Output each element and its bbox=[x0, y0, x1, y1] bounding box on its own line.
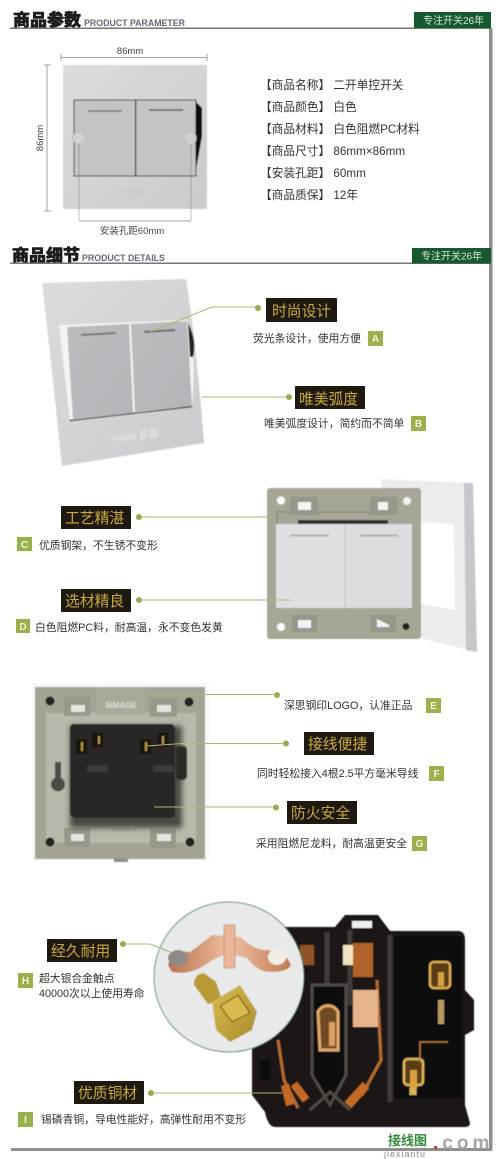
watermark: 接线图 bbox=[388, 1133, 427, 1148]
header: product details: PRODUCT DETAILS bbox=[82, 253, 165, 263]
spec list: 【商品材料】 白色阻燃PC材料 bbox=[260, 122, 420, 136]
callout C: 工艺精湛: 优质钢架，不生锈不变形 bbox=[39, 538, 158, 552]
callout G: 防火安全 bbox=[154, 801, 427, 851]
callout I: 优质铜材: 锡磷青铜，导电性能好，高弹性耐用不变形 bbox=[41, 1112, 246, 1126]
header: product details bbox=[10, 246, 491, 266]
callout I: 优质铜材: 优质铜材 bbox=[78, 1085, 137, 1102]
callout A: 时尚设计: 荧光条设计，使用方便 bbox=[253, 331, 361, 345]
header: product parameter bbox=[10, 10, 491, 30]
header: product parameter: PRODUCT PARAMETER bbox=[84, 18, 186, 28]
header: product details: 专注开关26年 bbox=[421, 250, 482, 262]
spec list: 【商品颜色】 白色 bbox=[260, 100, 357, 114]
callout I: 优质铜材 bbox=[18, 1081, 282, 1127]
spec list: 【商品名称】 二开单控开关 bbox=[260, 78, 404, 92]
watermark: .com bbox=[433, 1133, 493, 1154]
callout F: 接线便捷: F bbox=[433, 769, 440, 780]
photo: switch opened with frame bbox=[267, 479, 477, 652]
watermark bbox=[383, 1133, 493, 1159]
60mm hole spacing bbox=[79, 144, 191, 237]
callout D: 选材精良: D bbox=[19, 622, 27, 633]
callout G: 防火安全: 防火安全 bbox=[291, 804, 350, 822]
switch front view: SIMON bbox=[121, 189, 143, 196]
86mm width dimension bbox=[61, 46, 207, 61]
callout D: 选材精良: 白色阻燃PC料，耐高温，永不变色发黄 bbox=[35, 620, 223, 634]
callout H: 经久耐用: 超大银合金触点 bbox=[39, 971, 115, 985]
header: product parameter: 专注开关26年 bbox=[423, 14, 484, 27]
callout I: 优质铜材: I bbox=[24, 1115, 27, 1126]
callout A: 时尚设计: 时尚设计 bbox=[272, 303, 331, 320]
photo: switch perspective view bbox=[42, 279, 204, 466]
callout A: 时尚设计: A bbox=[372, 334, 379, 345]
callout C: 工艺精湛 bbox=[17, 506, 272, 552]
header: product parameter: 商品参数 bbox=[13, 10, 81, 30]
callout H: 经久耐用 bbox=[18, 939, 170, 1000]
callout H: 经久耐用: 经久耐用 bbox=[51, 943, 110, 960]
photo: switch internals bbox=[252, 915, 474, 1127]
spec list bbox=[260, 78, 420, 202]
86mm height dimension: 86mm bbox=[35, 125, 46, 151]
callout H: 经久耐用: 40000次以上使用寿命 bbox=[39, 986, 145, 1000]
panel: switch dimensions diagram bbox=[35, 46, 207, 237]
spec list: 【商品尺寸】 86mm×86mm bbox=[260, 144, 405, 158]
callout G: 防火安全: 采用阻燃尼龙料，耐高温更安全 bbox=[256, 836, 407, 850]
spec list: 【安装孔距】 60mm bbox=[260, 166, 366, 180]
photo: switch back view: SIMAGE bbox=[105, 701, 137, 710]
callout D: 选材精良: 选材精良 bbox=[65, 593, 124, 610]
callout C: 工艺精湛: C bbox=[21, 540, 28, 551]
60mm hole spacing: 安装孔距60mm bbox=[100, 225, 164, 237]
callout B: 唯美弧度 bbox=[202, 386, 426, 431]
callout E: 钢印LOGO bbox=[144, 692, 441, 713]
86mm width dimension: 86mm bbox=[117, 46, 143, 57]
spec list: 【商品质保】 12年 bbox=[260, 188, 358, 202]
86mm height dimension bbox=[35, 65, 51, 211]
header: product details: 商品细节 bbox=[12, 246, 80, 266]
callout F: 接线便捷 bbox=[147, 732, 444, 781]
callout F: 接线便捷: 同时轻松接入4根2.5平方毫米导线 bbox=[257, 766, 419, 780]
icon: copper contact bridge bbox=[168, 925, 291, 973]
callout E: 钢印LOGO: 深思钢印LOGO，认准正品 bbox=[284, 699, 412, 712]
magnified circle with contact parts bbox=[154, 902, 304, 1052]
watermark: jiexiantu bbox=[383, 1149, 426, 1159]
photo: switch back view: 807JK-1 bbox=[111, 826, 137, 833]
callout D: 选材精良 bbox=[16, 589, 290, 634]
callout B: 唯美弧度: 唯美弧度 bbox=[299, 391, 358, 408]
photo: switch perspective view: clage 良豪 bbox=[110, 427, 159, 444]
callout F: 接线便捷: 接线便捷 bbox=[308, 736, 367, 753]
callout B: 唯美弧度: B bbox=[415, 419, 422, 430]
callout G: 防火安全: G bbox=[416, 839, 424, 850]
photo: switch back view bbox=[32, 683, 209, 862]
callout B: 唯美弧度: 唯美弧度设计，简约而不简单 bbox=[264, 416, 405, 430]
callout C: 工艺精湛: 工艺精湛 bbox=[65, 510, 124, 527]
callout H: 经久耐用: H bbox=[22, 976, 29, 987]
switch front view bbox=[63, 65, 207, 209]
callout A: 时尚设计 bbox=[150, 298, 383, 346]
callout E: 钢印LOGO: E bbox=[430, 701, 437, 712]
icon: brass terminal bbox=[194, 973, 257, 1042]
